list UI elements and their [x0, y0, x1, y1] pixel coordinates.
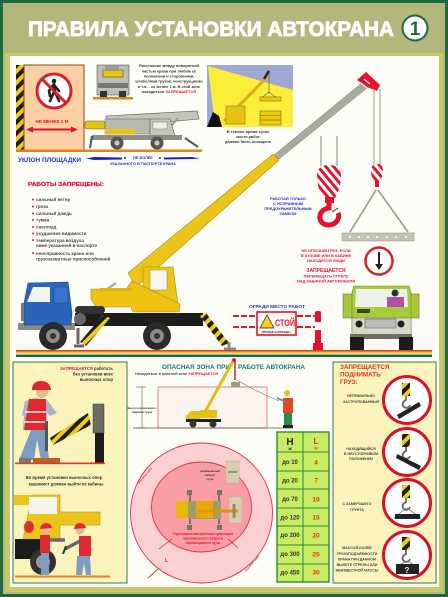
panel: outriggers — [13, 362, 127, 583]
illustration: main truck crane — [18, 72, 380, 350]
table: height and distance: 4 — [314, 460, 318, 466]
chart: plan danger zone: Опасная зона — [244, 554, 260, 573]
text: operator leaves cab: Во время установки выносных опор — [26, 475, 103, 480]
heading: forbidden work: РАБОТЫ ЗАПРЕЩЕНЫ: — [28, 182, 104, 188]
table: height and distance: 30 — [312, 570, 320, 576]
chart: elevation danger zone — [128, 358, 293, 428]
text: sign captions: МАССОЙ БОЛЕЕ — [342, 546, 372, 550]
crane plan view — [176, 490, 238, 530]
illustration: crane rear view — [93, 65, 133, 100]
text: no boom over cab: ЗАПРЕЩАЕТСЯ — [306, 268, 346, 274]
text: clearance rule: штабелями грузов, конструкциями — [135, 78, 203, 84]
chart: plan danger zone: перемещаемого груза — [186, 541, 220, 545]
text: outriggers rule: выносных опор — [80, 377, 113, 382]
caption: night lighting: место работ — [236, 134, 260, 139]
table: height and distance: 7 — [314, 478, 318, 484]
table: height and distance: 15 — [312, 514, 320, 522]
caption: night lighting — [225, 129, 272, 144]
illustration: crane side view — [85, 111, 199, 150]
text: clearance rule: положении и сторонними, — [144, 74, 194, 78]
text: clearance rule: находиться ЗАПРЕЩАЕТСЯ — [142, 89, 196, 94]
text: clearance rule — [135, 63, 203, 94]
sign: unstable load — [384, 428, 430, 476]
number badge — [402, 16, 428, 40]
list: forbidden conditions: туман — [36, 218, 50, 222]
sign: stuck load — [384, 376, 430, 424]
icon: no lowering sign — [366, 248, 392, 274]
text: sign captions: КРАНА ПРИ ДАННОМ — [338, 558, 376, 562]
chart: plan danger zone: L — [165, 558, 168, 564]
heading: forbidden to lift: ПОДНИМАТЬ — [340, 372, 381, 378]
chart: plan danger zone: габарит — [205, 473, 216, 477]
table: height and distance: до 200 — [280, 533, 300, 539]
list: forbidden conditions: ухудшение видимости — [36, 231, 87, 236]
text: sign captions: ПОЛОЖЕНИИ — [349, 457, 373, 461]
table: height and distance: Н — [286, 437, 294, 448]
caption: night lighting: должно быть освещено — [225, 139, 272, 144]
sign: unknown mass: ? — [405, 566, 410, 575]
text: sign captions: НАХОДЯЩИЙСЯ — [346, 447, 376, 451]
chart: plan danger zone: Горизонтальная проекция траектории — [173, 532, 233, 536]
table: height and distance: м — [314, 446, 318, 450]
table: height and distance: до 70 — [282, 497, 299, 503]
illustration: stop barrier: ПРОХОД ЗАПРЕЩЕН — [262, 330, 290, 334]
text: safety latch: С ИСПРАВНЫМ — [273, 201, 303, 206]
ground line — [16, 150, 202, 152]
list: forbidden conditions: сильный ветер — [36, 196, 70, 202]
cab — [21, 282, 72, 325]
illustration: load hook — [317, 136, 341, 225]
caption: night lighting: В темное время суток — [227, 129, 269, 134]
text: operator leaves cab: машинист должен выйти из кабины — [29, 482, 104, 486]
text: sign captions: С ЗАМЕРЗШЕГО — [342, 502, 372, 506]
text: no load over people: В КУЗОВЕ ИЛИ В КАБИНЕ — [301, 253, 351, 258]
list: forbidden conditions — [32, 196, 111, 262]
illustration: workers and crane — [14, 495, 110, 578]
arrow: allowed slope — [86, 156, 200, 166]
table: height and distance: 10 — [312, 496, 320, 504]
list: forbidden conditions: неисправность крана или — [36, 251, 94, 256]
heading: forbidden to lift — [340, 364, 390, 386]
table: height and distance: 25 — [312, 552, 320, 558]
chart: plan danger zone: груза — [207, 478, 214, 481]
text: sign captions: НЕИЗВЕСТНОЙ МАССЫ — [336, 568, 379, 572]
list: forbidden conditions: температура воздуха — [36, 238, 84, 243]
table: height and distance: L — [314, 437, 319, 446]
table: height and distance: до 10 — [282, 460, 299, 466]
chart: elevation danger zone: падения груза — [132, 410, 153, 414]
chassis — [18, 306, 236, 349]
distance label: НЕ МЕНЕЕ 1 М — [36, 119, 69, 124]
number badge: 1 — [410, 19, 421, 40]
text: sign captions: ЗАСТРОПОВАННЫЙ — [343, 400, 380, 404]
chart: plan danger zone: максимального габарита — [183, 536, 223, 540]
text: sign captions — [336, 394, 380, 572]
chart: elevation danger zone: Высота возможного — [128, 406, 157, 410]
illustration: stop barrier — [233, 311, 323, 350]
title: ПРАВИЛА УСТАНОВКИ АВТОКРАНА — [28, 18, 394, 41]
illustration: green truck — [343, 286, 419, 350]
chart: plan danger zone: минимальный — [200, 469, 220, 473]
text: outriggers rule: ЗАПРЕЩАЕТСЯ работать — [60, 366, 113, 371]
chart: plan danger zone: Опасная зона — [137, 466, 153, 485]
heading: danger zone: ОПАСНАЯ ЗОНА ПРИ — [162, 364, 230, 371]
text: operator leaves cab — [26, 475, 104, 486]
text: sign captions: ГРУНТА — [350, 508, 364, 512]
arrow: allowed slope: УКАЗАННОГО В ПАСПОРТЕ КРАНА — [110, 162, 176, 166]
worker with rope — [277, 390, 293, 428]
panel: forbidden loads — [333, 362, 436, 583]
text: sign captions: В НЕУСТОЙЧИВОМ — [344, 452, 378, 456]
arrow: allowed slope: НЕ БОЛЕЕ — [133, 156, 153, 160]
text: no load over people — [301, 248, 351, 263]
text: outriggers rule — [60, 366, 114, 382]
arrow: distance — [26, 126, 78, 132]
illustration: stop barrier: СТОЙ — [275, 317, 295, 329]
table: height and distance — [277, 432, 329, 582]
table: height and distance: 20 — [312, 532, 320, 540]
table: height and distance: до 300 — [280, 552, 300, 558]
chart: plan danger zone — [130, 443, 272, 583]
text: sign captions: НЕПРАВИЛЬНО — [347, 394, 375, 398]
list: forbidden conditions: гроза — [36, 204, 48, 209]
table: height and distance: м — [288, 446, 292, 451]
heading: danger zone continued: РАБОТЕ АВТОКРАНА — [238, 364, 305, 371]
text: no boom over cab — [297, 268, 355, 284]
crane turret — [91, 267, 180, 312]
panel: minimum distance — [16, 65, 84, 150]
text: outriggers rule: без установки всех — [73, 372, 114, 376]
list: forbidden conditions: грузозахватных приспособлений — [36, 256, 111, 262]
text: sign captions: ВЫЛЕТЕ СТРЕЛЫ ИЛИ — [337, 563, 378, 567]
icon: no pedestrians sign — [37, 74, 71, 108]
label: fence the site: ОГРАДИ МЕСТО РАБОТ — [249, 304, 305, 310]
wheels — [39, 322, 171, 350]
illustration: worker at outrigger — [15, 381, 105, 464]
list: forbidden conditions: ниже указанной в паспорте — [36, 242, 98, 248]
table: height and distance: до 120 — [280, 516, 300, 522]
list: forbidden conditions: снегопад — [36, 224, 57, 230]
text: clearance rule: частью крана при любом её — [142, 68, 197, 74]
table: height and distance: до 20 — [282, 478, 299, 484]
illustration: night lighting — [207, 65, 293, 127]
heading: forbidden to lift: ГРУЗ: — [340, 379, 358, 386]
text: slope heading: УКЛОН ПЛОЩАДКИ — [18, 157, 81, 164]
text: sign captions: ГРУЗОПОДЪЁМНОСТИ — [337, 552, 378, 556]
text: clearance rule: Расстояние между поворотной — [139, 63, 200, 68]
sign: unknown mass — [384, 532, 430, 578]
boom — [128, 72, 380, 287]
text: staying forbidden: Находиться в опасной зоне ЗАПРЕЩАЕТСЯ — [135, 372, 218, 376]
heading: forbidden to lift: ЗАПРЕЩАЕТСЯ — [340, 364, 390, 371]
text: clearance rule: и т.п. - не менее 1 м. В этой зоне — [138, 84, 201, 89]
main ground stripes — [16, 350, 432, 357]
text: safety latch: РАБОТАЙ ТОЛЬКО — [270, 196, 306, 201]
text: safety latch — [264, 196, 312, 216]
text: safety latch: ПРЕДОХРАНИТЕЛЬНЫМ — [264, 206, 312, 211]
illustration: suspended load — [342, 89, 414, 241]
text: no load over people: НАХОДЯТСЯ ЛЮДИ — [307, 258, 345, 263]
sign: frozen load — [384, 480, 430, 526]
text: no load over people: НЕ ОПУСКАЙ ГРУЗ, ЕСЛИ — [301, 248, 351, 253]
table: height and distance: до 450 — [280, 570, 300, 576]
text: safety latch: ЗАМКОМ — [279, 211, 297, 216]
text: no boom over cab: ПЕРЕМЕЩАТЬ СТРЕЛУ — [304, 274, 349, 278]
list: forbidden conditions: сильный дождь — [36, 210, 72, 216]
text: no boom over cab: НАД КАБИНОЙ АВТОМОБИЛЯ — [297, 278, 355, 284]
